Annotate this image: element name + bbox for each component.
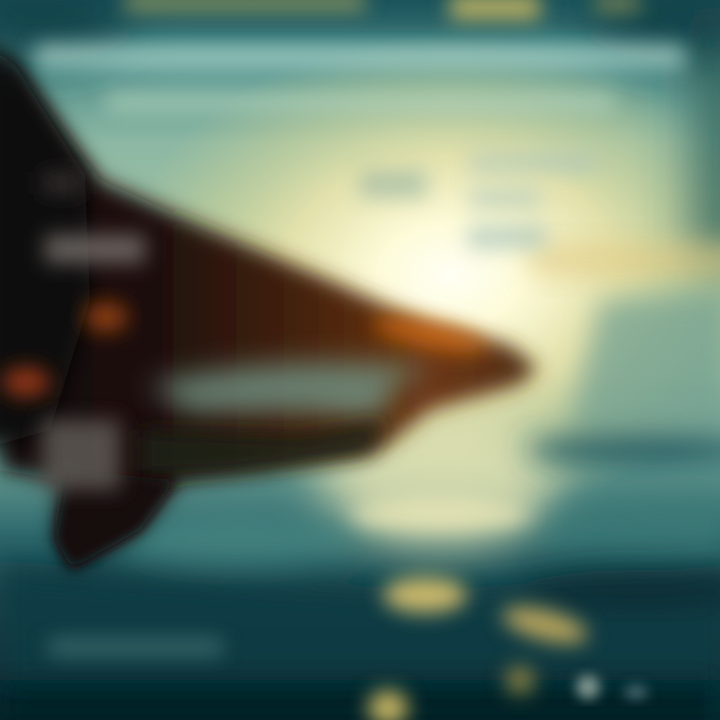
sun glow: [120, 35, 720, 550]
marker: orange spot upper: [84, 302, 128, 332]
footer text: blurred caption: [48, 637, 223, 657]
heading: blurred title line 3: [105, 92, 615, 112]
shark: body with orange snout: [0, 50, 538, 570]
shark: dark dorsal fin: [0, 40, 90, 450]
icon: footer logos: [576, 675, 648, 699]
shark: pale belly: [150, 362, 430, 420]
shark: lower jaw shadow: [140, 420, 385, 478]
distant sea panel, right: [525, 290, 720, 560]
heading: blurred title line 2: [35, 44, 685, 70]
shark: pectoral fin: [55, 470, 175, 568]
text block: small label: [360, 170, 426, 198]
text block: paragraph: [468, 155, 595, 249]
sun reflections on water: [350, 499, 591, 720]
warm horizon band: [530, 245, 720, 275]
label block: upper grey on shark: [42, 172, 145, 263]
ocean dark waves: [0, 516, 720, 720]
edge haze: [0, 0, 720, 270]
label block: lower grey on shark: [42, 420, 120, 490]
marker: orange spot left: [2, 367, 50, 397]
heading: blurred title line 1: [125, 0, 640, 20]
shark: orange highlight on snout: [371, 310, 489, 360]
